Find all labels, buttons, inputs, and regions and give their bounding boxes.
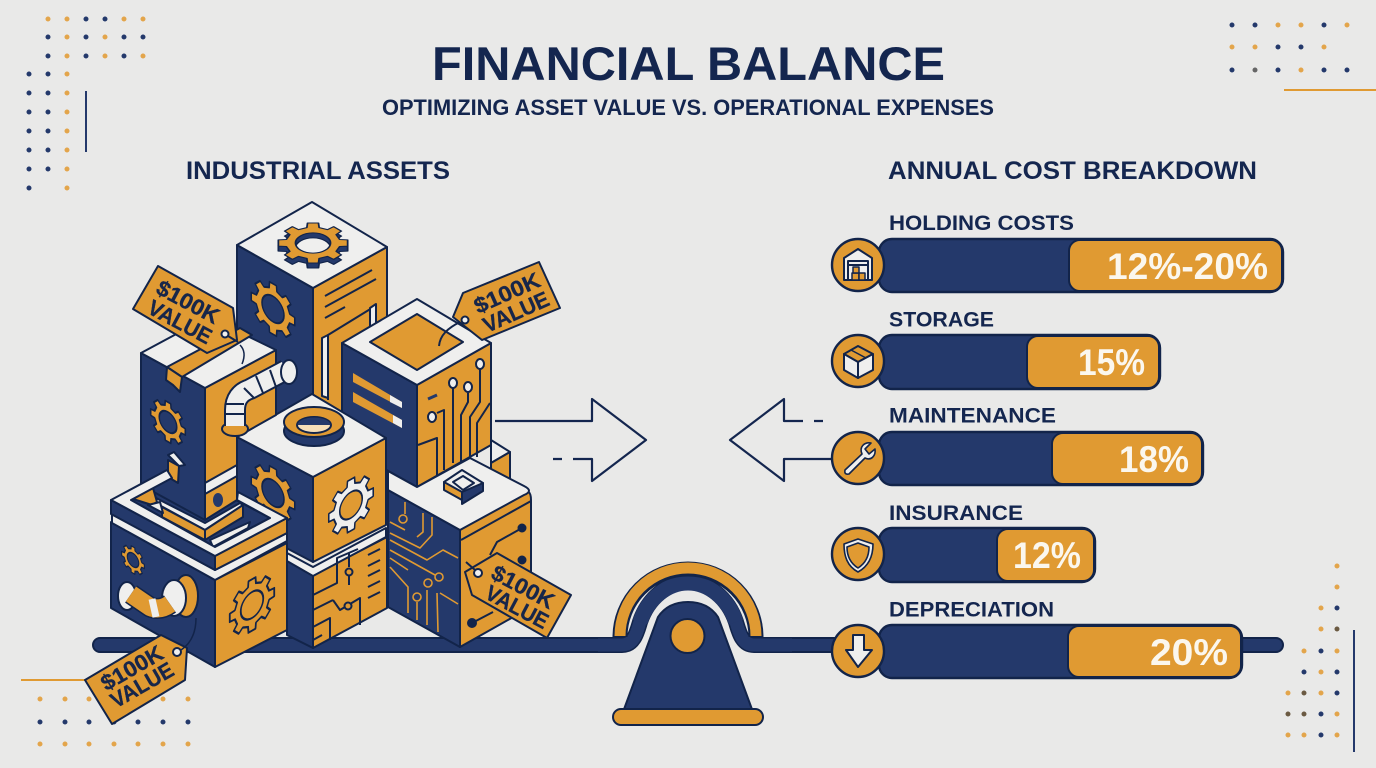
cost row: holding costs [832, 212, 1283, 292]
cost row: holding costs: 12%-20% [1107, 246, 1268, 287]
cost row: storage: 15% [1078, 342, 1145, 383]
industrial asset blocks [111, 202, 531, 667]
cost row: depreciation: DEPRECIATION [889, 599, 1054, 622]
arrow: left pointing [730, 399, 832, 481]
cost row: storage [832, 308, 1160, 389]
block: lower right circuit block [388, 458, 531, 647]
cost row: insurance: INSURANCE [889, 502, 1023, 525]
pipe on block [222, 360, 297, 436]
icon: box [844, 346, 873, 378]
price tag: lower right: $100K [487, 560, 559, 614]
decorative dots: bottom right [1288, 566, 1354, 752]
heading: annual cost breakdown: ANNUAL COST BREAKDOWN [888, 157, 1257, 185]
price tag: lower right [465, 553, 571, 638]
price tag: bottom left: $100K [96, 640, 168, 696]
cost row: maintenance: 18% [1119, 439, 1189, 480]
block: lower circuit block [287, 528, 387, 648]
fulcrum and arch [598, 568, 792, 725]
icon: warehouse [844, 249, 872, 280]
block: small back block [491, 440, 510, 482]
icon: shield [844, 539, 873, 572]
decorative dots: top left [29, 19, 143, 188]
price tag: top right: $100K [470, 267, 544, 319]
title: FINANCIAL BALANCE [432, 37, 945, 90]
pipe on base [118, 575, 198, 617]
arrow: right pointing [495, 399, 646, 481]
block: tall gear block [237, 202, 387, 470]
price tag: top left [133, 266, 238, 353]
price tag: top left: VALUE [144, 295, 216, 349]
block: circuit tower [342, 299, 491, 487]
block: pipe block [141, 317, 297, 520]
price tag: top right [453, 262, 560, 340]
price tag: lower right: VALUE [481, 580, 553, 634]
icon: down arrow [846, 635, 872, 667]
cost row: storage: STORAGE [889, 308, 994, 332]
cost row: holding costs: HOLDING COSTS [889, 212, 1074, 235]
cost row: insurance: 12% [1013, 535, 1081, 576]
icon: wrench [845, 443, 875, 474]
decorative dots: top right [1232, 25, 1376, 90]
decorative dots: bottom left [21, 680, 188, 744]
heading: industrial assets: INDUSTRIAL ASSETS [186, 157, 450, 185]
frame rim [111, 470, 287, 556]
balance beam [93, 638, 1283, 652]
subtitle: OPTIMIZING ASSET VALUE VS. OPERATIONAL EXPENSES [382, 95, 994, 120]
price tag: top right: VALUE [479, 286, 553, 338]
price tag: bottom left [85, 618, 196, 724]
cost row: maintenance: MAINTENANCE [889, 405, 1056, 428]
price tag: top left: $100K [152, 275, 224, 329]
cost row: depreciation [832, 599, 1242, 678]
price tag: bottom left: VALUE [106, 657, 178, 713]
cost row: insurance [832, 502, 1095, 582]
cost row: depreciation: 20% [1150, 632, 1228, 673]
block: centre cube [237, 394, 386, 562]
block: bottom left base [111, 472, 287, 667]
cost row: maintenance [832, 405, 1203, 485]
plinth inside frame [133, 488, 250, 547]
